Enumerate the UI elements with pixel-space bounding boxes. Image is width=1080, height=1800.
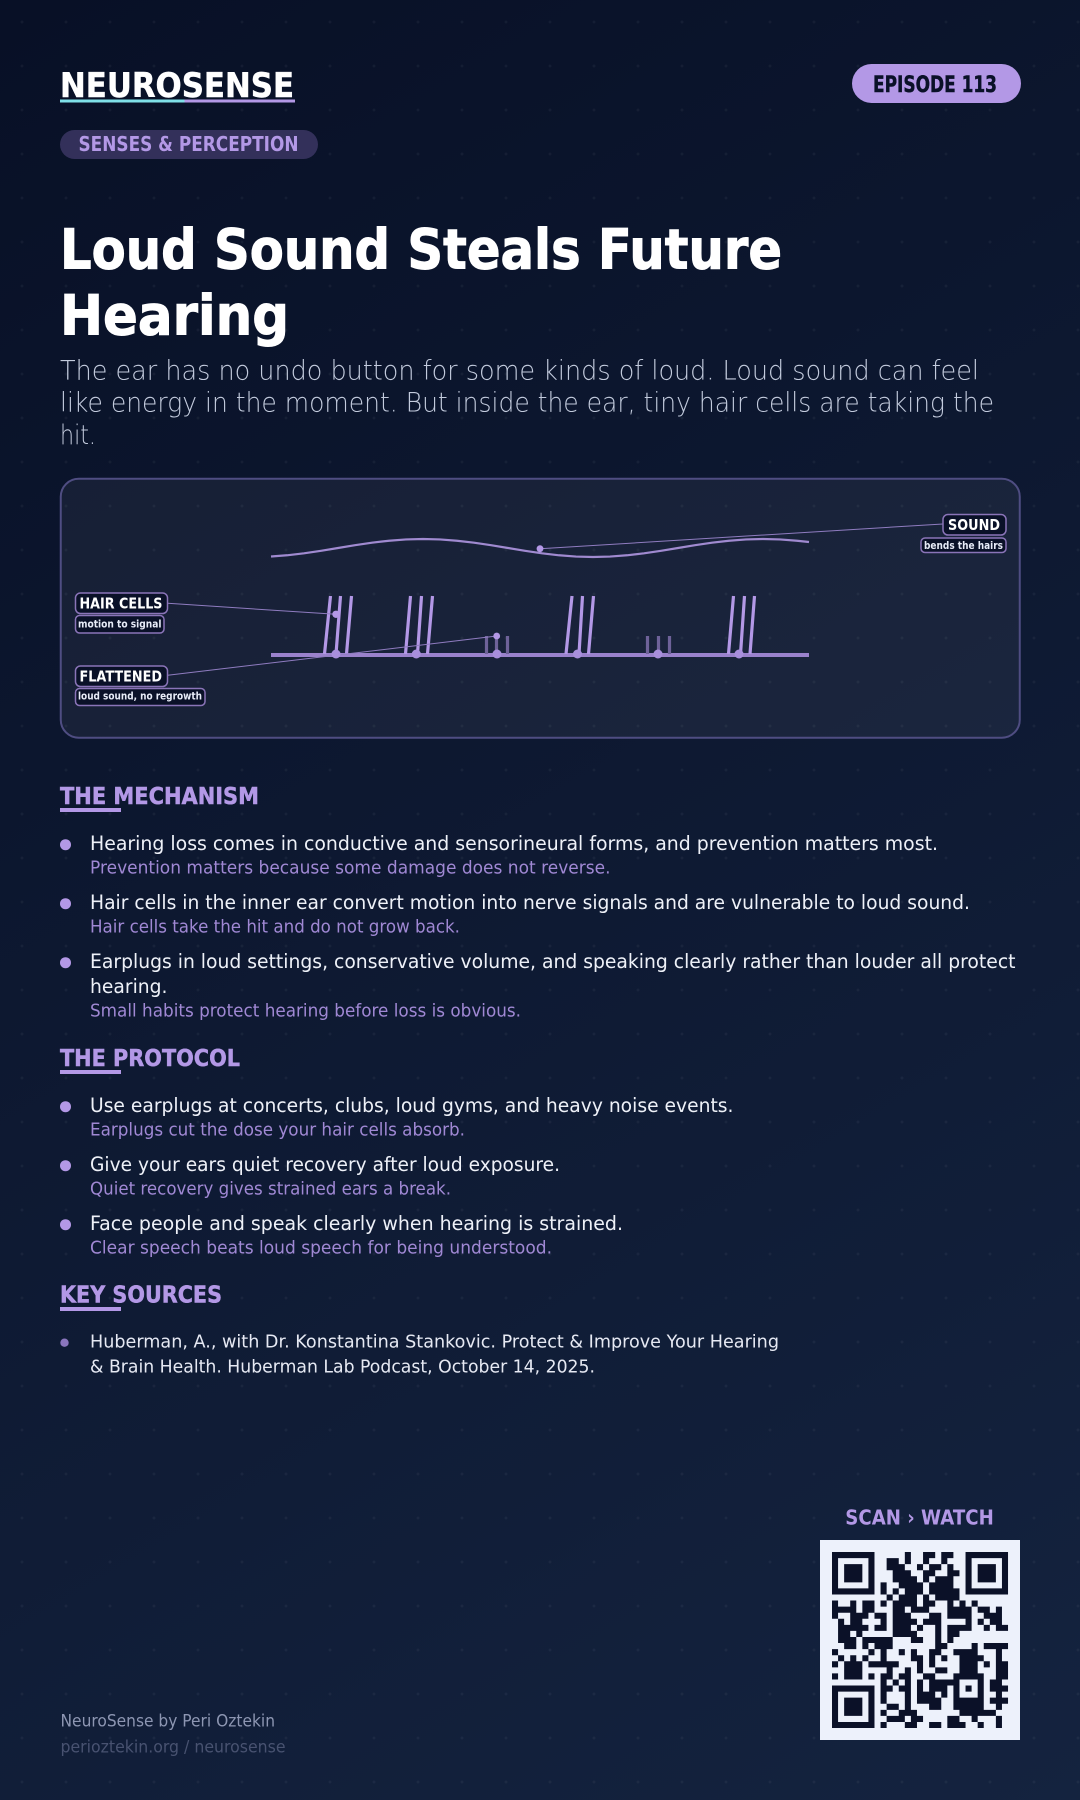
- callout: sound: [921, 514, 1006, 552]
- bullet 3: Earplugs in loud settings, conservative volume, and speaking clearly rather than louder all protect: [90, 950, 1016, 973]
- bullet 3: [60, 1212, 623, 1258]
- source entry: Huberman, A., with Dr. Konstantina Stankovic. Protect & Improve Your Hearing: [90, 1332, 779, 1353]
- bullet 2: Quiet recovery gives strained ears a break.: [90, 1178, 451, 1199]
- section: the mechanism: [60, 782, 1016, 1022]
- section: the protocol: [60, 1044, 734, 1258]
- source entry: [60, 1332, 779, 1378]
- scan label: SCAN › WATCH: [845, 1505, 994, 1529]
- footer credit: NeuroSense by Peri Oztekin: [60, 1712, 275, 1731]
- healthy hair cells: [324, 596, 754, 654]
- bullet 1: [60, 832, 938, 878]
- callout: flattened: [76, 666, 205, 706]
- bullet 3: Face people and speak clearly when hearing is strained.: [90, 1212, 623, 1235]
- subtitle: like energy in the moment. But inside the ear, tiny hair cells are taking the: [60, 388, 994, 418]
- subtitle: The ear has no undo button for some kinds of loud. Loud sound can feel: [60, 356, 979, 386]
- bullet 3: [60, 950, 1016, 1022]
- bullet 1: Prevention matters because some damage does not reverse.: [90, 857, 610, 878]
- callout: hair cells: HAIR CELLS: [80, 594, 162, 612]
- section: key sources: [60, 1281, 779, 1378]
- heading: the protocol: THE PROTOCOL: [60, 1044, 240, 1072]
- footer credit: perioztekin.org / neurosense: [60, 1737, 286, 1756]
- title: [60, 218, 782, 348]
- title: Hearing: [60, 284, 289, 348]
- bullet 1: Use earplugs at concerts, clubs, loud gyms, and heavy noise events.: [90, 1094, 734, 1117]
- flattened hair cells: [486, 636, 670, 654]
- callout: flattened: loud sound, no regrowth: [78, 690, 202, 702]
- bullet 1: Earplugs cut the dose your hair cells absorb.: [90, 1119, 465, 1140]
- anchor dots: [332, 545, 744, 658]
- callout: hair cells: motion to signal: [78, 618, 162, 630]
- footer credit: [60, 1712, 286, 1756]
- bullet 1: Hearing loss comes in conductive and sensorineural forms, and prevention matters most.: [90, 832, 938, 855]
- subtitle: hit.: [60, 420, 96, 451]
- episode badge: EPISODE 113: [873, 73, 997, 98]
- callout: sound: SOUND: [948, 516, 1000, 534]
- bullet 3: Clear speech beats loud speech for being understood.: [90, 1237, 552, 1258]
- sound wave: [271, 539, 809, 557]
- panel: ear diagram: [61, 479, 1020, 738]
- heading: key sources: KEY SOURCES: [60, 1281, 222, 1309]
- bullet 3: Small habits protect hearing before loss is obvious.: [90, 1000, 521, 1022]
- bullet 2: Give your ears quiet recovery after loud exposure.: [90, 1153, 560, 1176]
- heading: the mechanism: THE MECHANISM: [60, 782, 259, 810]
- bullet 2: [60, 1153, 560, 1199]
- membrane baseline: [271, 653, 809, 657]
- title: Loud Sound Steals Future: [60, 218, 782, 282]
- bullet 1: [60, 1094, 734, 1140]
- callout: sound: bends the hairs: [924, 540, 1003, 552]
- bullet 2: Hair cells take the hit and do not grow back.: [90, 916, 460, 937]
- QR code: [820, 1540, 1020, 1740]
- subtitle: [60, 356, 994, 451]
- bullet 3: hearing.: [90, 975, 168, 998]
- callout: hair cells: [76, 593, 168, 633]
- bullet 2: [60, 891, 970, 937]
- brand wordmark: NEUROSENSE: [60, 66, 294, 106]
- source entry: & Brain Health. Huberman Lab Podcast, October 14, 2025.: [90, 1357, 595, 1378]
- callout: flattened: FLATTENED: [80, 668, 162, 686]
- episode badge: [852, 64, 1021, 103]
- leader lines: [168, 524, 943, 675]
- bullet 2: Hair cells in the inner ear convert motion into nerve signals and are vulnerable to loud sound.: [90, 891, 970, 914]
- category pill: SENSES & PERCEPTION: [78, 132, 298, 156]
